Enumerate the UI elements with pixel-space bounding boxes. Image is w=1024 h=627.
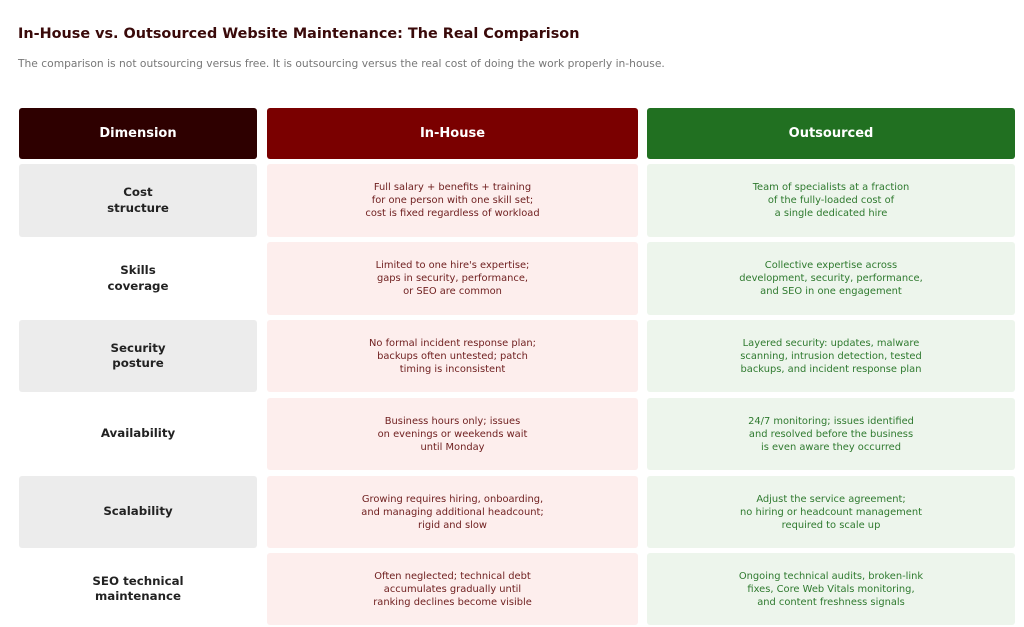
outsourced: skills	[647, 242, 1015, 315]
header: in-house	[267, 108, 638, 159]
row: cost structure	[19, 164, 257, 237]
outsourced: scalability	[647, 476, 1015, 548]
header: outsourced: Outsourced	[789, 126, 873, 141]
in-house: seo: ranking declines become visible	[373, 596, 532, 608]
in-house: cost: cost is fixed regardless of workload	[365, 208, 540, 219]
row: cost structure: structure	[107, 200, 169, 214]
in-house: skills: gaps in security, performance,	[377, 273, 528, 284]
outsourced: cost	[647, 164, 1015, 237]
row: seo: maintenance	[95, 589, 181, 603]
header: in-house: In-House	[420, 126, 485, 141]
in-house: seo: Often neglected; technical debt	[374, 570, 531, 582]
row: security: Security	[110, 340, 166, 354]
row: scalability	[19, 476, 257, 548]
in-house: scalability: and managing additional headcount;	[361, 506, 544, 518]
outsourced: cost: a single dedicated hire	[775, 208, 887, 219]
in-house: availability: until Monday	[420, 442, 484, 452]
in-house: scalability: rigid and slow	[418, 520, 487, 530]
outsourced: seo	[647, 553, 1015, 625]
row: scalability: Scalability	[103, 504, 173, 518]
outsourced: scalability: no hiring or headcount management	[740, 506, 922, 518]
outsourced: security: scanning, intrusion detection, tested	[740, 350, 922, 362]
in-house: availability: Business hours only; issues	[385, 416, 520, 426]
outsourced: security: Layered security: updates, malware	[743, 338, 919, 348]
row: skills	[107, 263, 168, 292]
in-house: availability: on evenings or weekends wait	[378, 428, 527, 440]
title: In-House vs. Outsourced Website Maintenance: The Real Comparison	[18, 26, 579, 42]
in-house: availability	[267, 398, 638, 470]
row: skills: Skills	[120, 263, 156, 277]
outsourced: cost: of the fully-loaded cost of	[768, 195, 894, 206]
subtitle: The comparison is not outsourcing versus free. It is outsourcing versus the real cost of doing the work properly in-house.	[18, 57, 665, 70]
in-house: cost: for one person with one skill set;	[372, 195, 533, 206]
in-house: security: backups often untested; patch	[377, 350, 528, 362]
outsourced: cost: Team of specialists at a fraction	[753, 182, 909, 193]
outsourced: skills: development, security, performance,	[739, 273, 923, 284]
row: security	[19, 320, 257, 392]
in-house: scalability: Growing requires hiring, onboarding,	[362, 494, 543, 504]
in-house: seo	[267, 553, 638, 625]
row: seo: SEO technical	[92, 574, 184, 588]
in-house: security: timing is inconsistent	[400, 364, 505, 374]
outsourced: skills: Collective expertise across	[765, 260, 897, 271]
header: dimension	[19, 108, 257, 159]
outsourced: availability: 24/7 monitoring; issues identified	[748, 416, 914, 426]
outsourced: availability: and resolved before the business	[749, 428, 913, 440]
in-house: scalability	[267, 476, 638, 548]
in-house: security	[267, 320, 638, 392]
outsourced: availability: is even aware they occurred	[761, 442, 901, 452]
in-house: skills: or SEO are common	[403, 286, 502, 297]
outsourced: scalability: Adjust the service agreement;	[756, 494, 906, 504]
row: cost structure: Cost	[123, 185, 153, 199]
in-house: security: No formal incident response plan;	[369, 338, 536, 348]
outsourced: scalability: required to scale up	[782, 520, 880, 530]
in-house: cost	[267, 164, 638, 237]
in-house: skills: Limited to one hire's expertise;	[376, 260, 529, 271]
in-house: skills	[267, 242, 638, 315]
outsourced: skills: and SEO in one engagement	[760, 286, 902, 297]
outsourced: security	[647, 320, 1015, 392]
row: availability: Availability	[101, 426, 175, 440]
row: security: posture	[112, 356, 164, 370]
outsourced: seo: Ongoing technical audits, broken-link	[739, 570, 923, 582]
outsourced: seo: fixes, Core Web Vitals monitoring,	[747, 584, 915, 594]
row: seo	[92, 574, 184, 603]
in-house: cost: Full salary + benefits + training	[374, 182, 531, 193]
header: dimension: Dimension	[99, 126, 177, 141]
header: outsourced	[647, 108, 1015, 159]
row: skills: coverage	[107, 278, 168, 292]
outsourced: seo: and content freshness signals	[757, 596, 905, 608]
outsourced: security: backups, and incident response plan	[741, 364, 921, 374]
outsourced: availability	[647, 398, 1015, 470]
in-house: seo: accumulates gradually until	[384, 584, 521, 594]
